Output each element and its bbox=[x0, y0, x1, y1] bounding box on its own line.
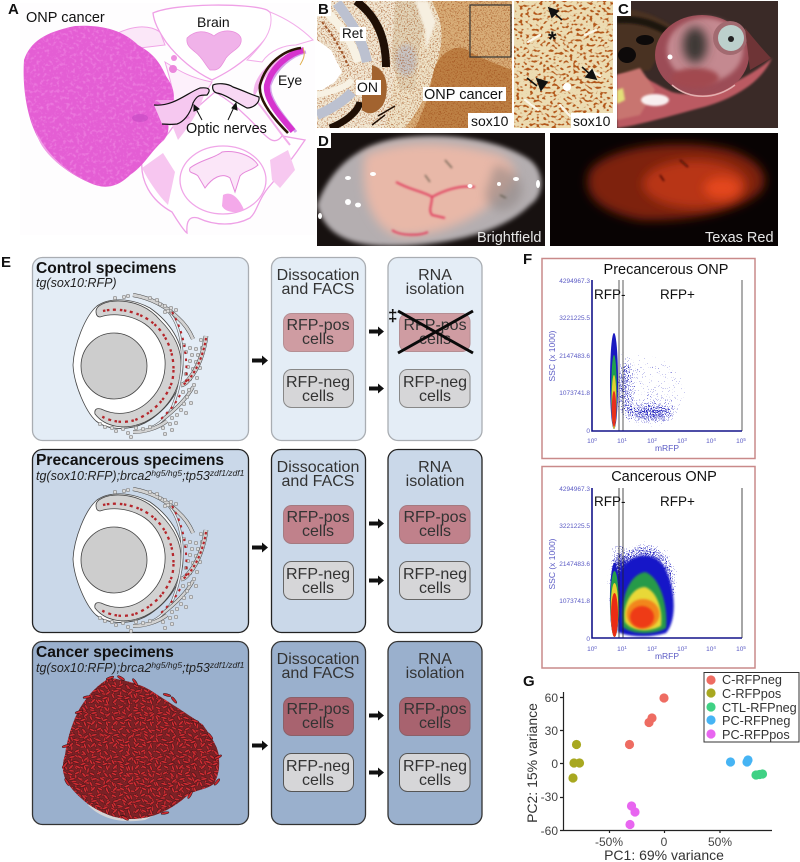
y tick labels: 0 bbox=[551, 757, 558, 771]
scatter density bbox=[610, 333, 690, 429]
panel: cancer specimens bbox=[32, 642, 248, 824]
RFP-pos cells bbox=[284, 698, 354, 736]
gates bbox=[619, 280, 742, 431]
asterisk: * bbox=[548, 27, 557, 52]
arrow: precancerous neg cells bbox=[369, 576, 384, 586]
panel G: PCA plot: PC2: 15% variance bbox=[524, 703, 540, 823]
flow plot: precancerous ONP bbox=[542, 258, 755, 458]
heading: RNA bbox=[418, 459, 452, 476]
arrow: cancer to dissociation bbox=[252, 740, 268, 750]
x axis ticks: 10 bbox=[587, 646, 594, 653]
y axis ticks bbox=[559, 486, 590, 643]
flow plot: precancerous ONP: SSC (x 1000) bbox=[547, 330, 557, 382]
RFP-pos cells bbox=[400, 506, 470, 544]
RFP-neg cells: cells bbox=[419, 772, 451, 789]
RFP-pos cells: RFP-pos bbox=[286, 509, 350, 526]
heading: Control specimens bbox=[36, 260, 177, 277]
legend bbox=[704, 672, 799, 742]
inset box bbox=[470, 5, 511, 57]
genotype: tg(sox10:RFP) bbox=[36, 276, 117, 290]
RFP-neg cells bbox=[400, 370, 470, 408]
gate labels: RFP+ bbox=[660, 287, 695, 302]
head tissue outlines bbox=[118, 5, 313, 233]
y tick labels: 60 bbox=[545, 691, 558, 705]
heading: Dissocation bbox=[277, 651, 359, 668]
gate labels: RFP- bbox=[594, 494, 626, 509]
RFP-neg cells: RFP-neg bbox=[286, 758, 350, 775]
RFP-pos cells: cells bbox=[302, 715, 334, 732]
y axis ticks: 1073741.8 bbox=[559, 390, 590, 397]
heading: isolation bbox=[406, 473, 464, 490]
flow plot: cancerous ONP: SSC (x 1000) bbox=[547, 538, 557, 590]
panel: control specimens bbox=[32, 258, 248, 440]
column: control RNA isolation bbox=[388, 258, 482, 440]
RFP-neg cells: RFP-neg bbox=[403, 374, 467, 391]
panel label A: A bbox=[8, 1, 19, 18]
RFP-pos cells: RFP-pos bbox=[286, 701, 350, 718]
heading: RNA bbox=[418, 651, 452, 668]
y axis ticks: 2147483.6 bbox=[559, 561, 590, 568]
RFP-pos cells: cells bbox=[419, 715, 451, 732]
photograph bbox=[617, 1, 778, 128]
gate labels bbox=[594, 494, 695, 509]
panel C: photo of fish with ONP tumour bbox=[617, 1, 778, 128]
gate labels bbox=[594, 287, 695, 302]
RFP-neg cells bbox=[400, 562, 470, 600]
legend: PC-RFPneg bbox=[722, 714, 790, 728]
axis titles: mRFP bbox=[655, 443, 679, 453]
y axis ticks: 4294967.3 bbox=[559, 278, 590, 285]
scatter density bbox=[610, 536, 678, 637]
genotype: hg5/hg5 bbox=[151, 468, 182, 478]
x axis ticks: 10 bbox=[677, 646, 684, 653]
tumour cell mass diagram bbox=[62, 675, 222, 821]
gates bbox=[619, 488, 742, 638]
column: precancerous RNA isolation bbox=[388, 450, 482, 632]
legend: C-RFPpos bbox=[722, 687, 781, 701]
axes bbox=[560, 692, 772, 833]
x tick labels: -50% bbox=[595, 835, 623, 849]
RFP-pos cells crossed out: cells bbox=[419, 331, 451, 348]
arrow: cancer pos cells bbox=[369, 710, 384, 720]
points: C-RFPneg bbox=[625, 693, 669, 749]
RFP-pos cells: RFP-pos bbox=[403, 701, 467, 718]
RFP-neg cells: RFP-neg bbox=[403, 566, 467, 583]
x axis ticks: 1 bbox=[624, 645, 627, 650]
gate labels: RFP+ bbox=[660, 494, 695, 509]
photograph bbox=[317, 133, 545, 246]
labels in panel A: Optic nerves bbox=[186, 121, 267, 137]
panel F label: F bbox=[523, 251, 532, 268]
x axis ticks: 10 bbox=[736, 438, 743, 445]
heading: and FACS bbox=[282, 281, 354, 298]
panel B: sox10 stained section bbox=[317, 1, 512, 129]
heading: isolation bbox=[406, 665, 464, 682]
RFP-neg cells: RFP-neg bbox=[403, 758, 467, 775]
axes bbox=[592, 280, 742, 431]
points: CTL-RFPneg bbox=[751, 769, 767, 780]
eye diagram bbox=[73, 489, 206, 631]
box bbox=[272, 258, 366, 440]
x axis ticks: 10 bbox=[736, 646, 743, 653]
x tick labels: 50% bbox=[708, 835, 732, 849]
y axis ticks: 3221225.5 bbox=[559, 523, 590, 530]
genotype: hg5/hg5 bbox=[151, 660, 182, 670]
genotype: ;tp53 bbox=[182, 661, 210, 675]
x axis ticks: 4 bbox=[713, 437, 716, 442]
arrow: cancer neg cells bbox=[369, 768, 384, 778]
genotype: zdf1/zdf1 bbox=[209, 468, 245, 478]
box bbox=[388, 642, 482, 824]
x axis ticks: 10 bbox=[617, 646, 624, 653]
x axis ticks: 5 bbox=[743, 645, 746, 650]
arrow: precancerous to dissociation bbox=[252, 542, 268, 552]
x axis ticks: 10 bbox=[706, 646, 713, 653]
heading: Dissocation bbox=[277, 267, 359, 284]
arrows to optic nerves bbox=[194, 103, 237, 120]
y axis ticks: 3221225.5 bbox=[559, 315, 590, 322]
RFP-neg cells: cells bbox=[302, 580, 334, 597]
RFP-neg cells: cells bbox=[419, 580, 451, 597]
x axis ticks: 10 bbox=[647, 438, 654, 445]
y axis ticks: 4294967.3 bbox=[559, 486, 590, 493]
x axis ticks: 0 bbox=[594, 645, 597, 650]
RFP-pos cells bbox=[284, 506, 354, 544]
section photograph bbox=[317, 1, 512, 128]
arrow: precancerous pos cells bbox=[369, 518, 384, 528]
arrow: control neg cells bbox=[369, 384, 384, 394]
RFP-neg cells bbox=[284, 562, 354, 600]
RFP-pos cells: cells bbox=[302, 523, 334, 540]
points: PC-RFPpos bbox=[625, 801, 640, 829]
RFP-pos cells: RFP-pos bbox=[286, 317, 350, 334]
x axis ticks bbox=[587, 437, 746, 445]
x tick labels bbox=[595, 835, 732, 849]
RFP-neg cells: cells bbox=[419, 388, 451, 405]
label Brightfield: Brightfield bbox=[477, 230, 541, 246]
heading: Precancerous specimens bbox=[36, 452, 224, 469]
x axis ticks: 1 bbox=[624, 437, 627, 442]
RFP-pos cells: cells bbox=[302, 331, 334, 348]
box bbox=[272, 642, 366, 824]
RFP-pos cells: RFP-pos bbox=[403, 509, 467, 526]
frame bbox=[542, 466, 755, 668]
points: PC-RFPneg bbox=[726, 755, 753, 767]
genotype: zdf1/zdf1 bbox=[209, 660, 245, 670]
box bbox=[272, 450, 366, 632]
genotype: ;tp53 bbox=[182, 469, 210, 483]
tumour mass bbox=[24, 26, 190, 187]
legend: CTL-RFPneg bbox=[722, 701, 797, 715]
panel label C: C bbox=[618, 1, 629, 18]
label ONP cancer: ONP cancer bbox=[424, 87, 503, 103]
heading: Dissocation bbox=[277, 459, 359, 476]
panel D: Texas Red fluorescence photo bbox=[550, 133, 778, 246]
panel label D: D bbox=[318, 133, 329, 150]
labels in panel A: Eye bbox=[278, 72, 302, 88]
legend: PC-RFPpos bbox=[722, 728, 790, 742]
x axis ticks: 10 bbox=[706, 438, 713, 445]
panel E label: E bbox=[1, 254, 11, 271]
optic nerves outline bbox=[154, 84, 259, 124]
x axis ticks bbox=[587, 645, 746, 653]
RFP-neg cells bbox=[284, 370, 354, 408]
x axis ticks: 2 bbox=[654, 437, 657, 442]
heading: isolation bbox=[406, 281, 464, 298]
panel G: PCA plot bbox=[523, 672, 799, 862]
panel B inset: higher magnification bbox=[514, 1, 613, 129]
column: precancerous dissociation and FACS bbox=[272, 450, 366, 632]
label sox10: sox10 bbox=[471, 113, 509, 129]
arrows in inset bbox=[527, 8, 596, 90]
flow plot: cancerous ONP bbox=[542, 466, 755, 668]
brain bbox=[187, 31, 241, 70]
title: Cancerous ONP bbox=[611, 469, 717, 485]
panel D: brightfield photo bbox=[317, 133, 545, 246]
y axis ticks: 0 bbox=[586, 428, 590, 435]
box bbox=[32, 642, 248, 824]
genotype: tg(sox10:RFP);brca2 bbox=[36, 661, 151, 675]
y tick labels bbox=[541, 691, 558, 838]
axis titles: mRFP bbox=[655, 651, 679, 661]
x axis ticks: 0 bbox=[594, 437, 597, 442]
label Texas Red: Texas Red bbox=[705, 230, 774, 246]
heading: RNA bbox=[418, 267, 452, 284]
panel A: histology section bbox=[8, 1, 315, 235]
RFP-neg cells: cells bbox=[302, 388, 334, 405]
label ON: ON bbox=[357, 79, 378, 95]
RFP-neg cells: RFP-neg bbox=[286, 566, 350, 583]
RFP-pos cells: cells bbox=[419, 523, 451, 540]
RFP-neg cells: cells bbox=[302, 772, 334, 789]
y tick labels: -30 bbox=[541, 790, 558, 804]
pale slide background bbox=[20, 3, 315, 235]
column: control dissociation and FACS bbox=[272, 258, 366, 440]
x axis ticks: 5 bbox=[743, 437, 746, 442]
double dagger: ‡ bbox=[388, 306, 397, 325]
RFP-neg cells bbox=[400, 754, 470, 792]
labels in panel A: ONP cancer bbox=[26, 10, 105, 26]
RFP-pos cells bbox=[400, 698, 470, 736]
title: Precancerous ONP bbox=[604, 262, 728, 278]
labels in panel A bbox=[26, 10, 302, 137]
column: cancer RNA isolation bbox=[388, 642, 482, 824]
x axis ticks: 3 bbox=[684, 645, 687, 650]
RFP-neg cells bbox=[284, 754, 354, 792]
RFP-neg cells: RFP-neg bbox=[286, 374, 350, 391]
panel: precancerous specimens bbox=[32, 450, 248, 632]
axes bbox=[592, 488, 742, 638]
y axis ticks bbox=[559, 278, 590, 435]
column: cancer dissociation and FACS bbox=[272, 642, 366, 824]
inset photograph bbox=[514, 1, 613, 128]
legend: C-RFPneg bbox=[722, 673, 782, 687]
box bbox=[388, 258, 482, 440]
y axis ticks: 1073741.8 bbox=[559, 598, 590, 605]
box bbox=[32, 450, 248, 632]
arrow: control pos cells bbox=[369, 326, 384, 336]
x axis ticks: 10 bbox=[677, 438, 684, 445]
box bbox=[32, 258, 248, 440]
x axis ticks: 10 bbox=[617, 438, 624, 445]
gate labels: RFP- bbox=[594, 287, 626, 302]
x tick labels: 0 bbox=[661, 835, 668, 849]
label sox10 inset: sox10 bbox=[573, 113, 611, 129]
RFP-pos cells crossed out: RFP-pos bbox=[403, 317, 467, 334]
x axis ticks: 10 bbox=[587, 438, 594, 445]
y tick labels: -60 bbox=[541, 824, 558, 838]
x axis ticks: 10 bbox=[647, 646, 654, 653]
RFP-pos cells bbox=[284, 314, 354, 352]
panel label G: G bbox=[523, 673, 535, 690]
heading: and FACS bbox=[282, 473, 354, 490]
x axis ticks: 3 bbox=[684, 437, 687, 442]
box bbox=[388, 450, 482, 632]
genotype: tg(sox10:RFP);brca2 bbox=[36, 469, 151, 483]
panel label B: B bbox=[318, 1, 329, 18]
y tick labels: 30 bbox=[545, 724, 558, 738]
arrow: control to dissociation bbox=[252, 356, 268, 366]
fluorescence photograph bbox=[550, 133, 778, 246]
heading: and FACS bbox=[282, 665, 354, 682]
y axis ticks: 2147483.6 bbox=[559, 353, 590, 360]
y axis ticks: 0 bbox=[586, 636, 590, 643]
x axis ticks: 4 bbox=[713, 645, 716, 650]
points: C-RFPpos bbox=[568, 740, 584, 783]
labels in panel A: Brain bbox=[197, 14, 230, 30]
frame bbox=[542, 258, 755, 458]
eye in section bbox=[253, 48, 306, 133]
eye diagram bbox=[73, 295, 206, 437]
heading: Cancer specimens bbox=[36, 644, 174, 661]
RFP-pos cells crossed out bbox=[398, 311, 473, 353]
x axis ticks: 2 bbox=[654, 645, 657, 650]
label Ret: Ret bbox=[342, 26, 363, 41]
